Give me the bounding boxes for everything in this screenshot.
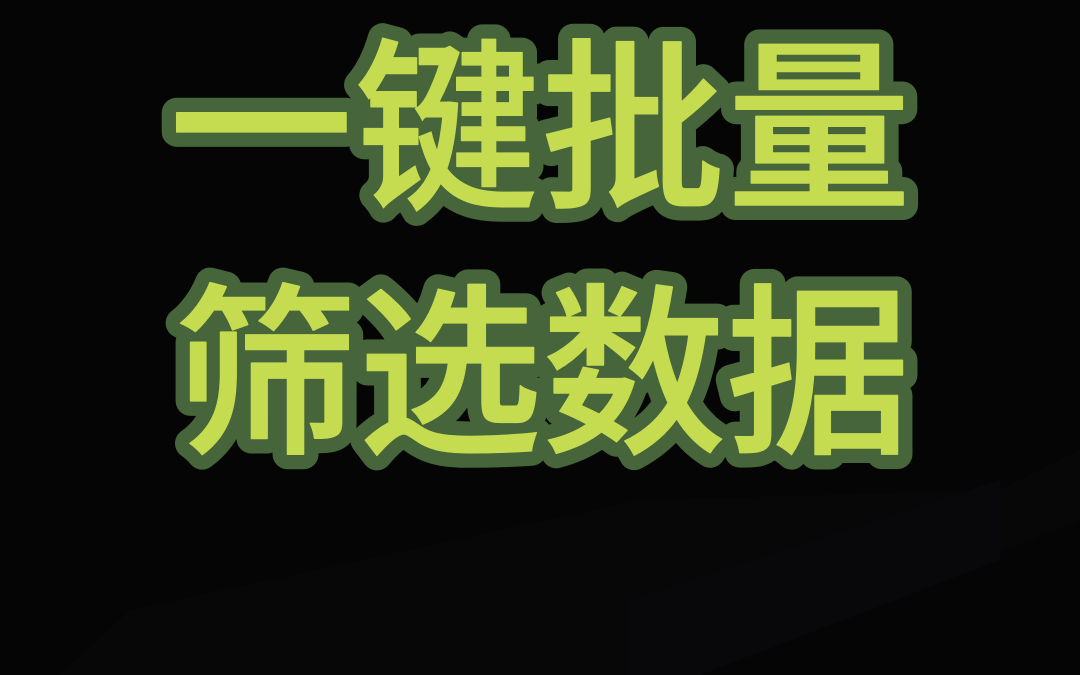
title line 2: 筛选数据 [174, 272, 910, 478]
title line 1: 一键批量 [169, 27, 913, 233]
title line 2: 筛选数据 [174, 272, 910, 478]
title line 1: 一键批量 [169, 27, 913, 233]
